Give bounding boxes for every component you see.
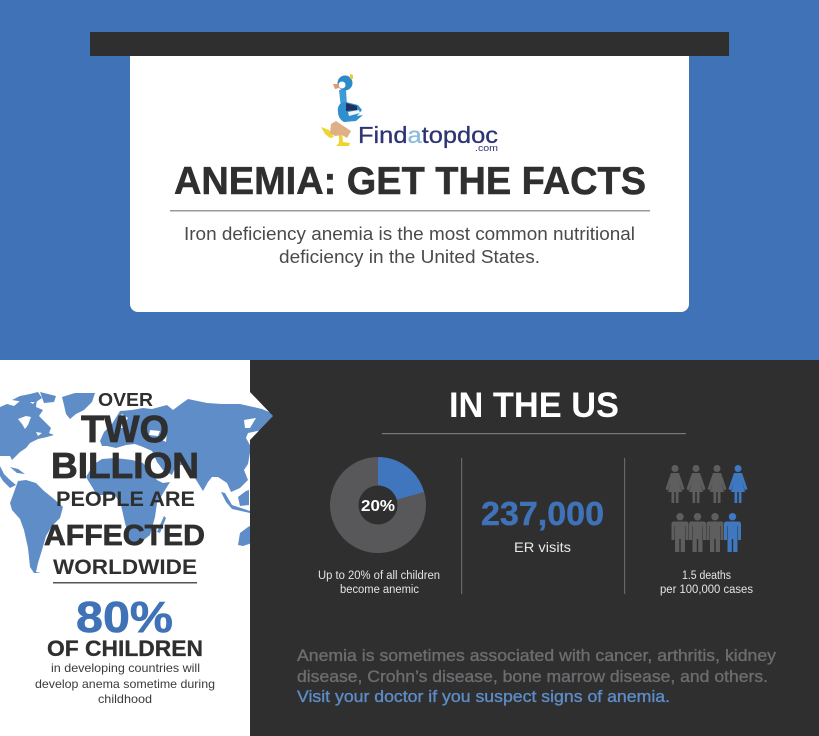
Greenland xyxy=(62,393,95,419)
PEOPLE ARE: PEOPLE ARE xyxy=(56,488,195,511)
logo: Findatopdoc xyxy=(321,74,498,153)
associated conditions text: disease, Crohn’s disease, bone marrow disease, and others. xyxy=(297,667,768,686)
heading rule xyxy=(382,433,686,434)
intro text: Iron deficiency anemia is the most common nutritional xyxy=(184,224,635,244)
header card xyxy=(90,32,729,312)
Madagascar xyxy=(157,516,166,533)
dark top bar xyxy=(90,32,729,56)
Great Lakes xyxy=(36,432,42,436)
panel: in the US xyxy=(250,360,819,736)
children description: in developing countries will xyxy=(51,661,200,675)
associated conditions text: Anemia is sometimes associated with cancer, arthritis, kidney xyxy=(297,646,777,665)
Baltic xyxy=(118,414,128,428)
title rule xyxy=(170,210,650,212)
call to action: Visit your doctor if you suspect signs of anemia. xyxy=(297,687,670,706)
donut chart: 20 percent: 20% xyxy=(361,498,395,515)
Philippines and Japan xyxy=(240,445,247,455)
Caribbean xyxy=(10,467,25,474)
80 percent statistic: 80% xyxy=(76,593,173,642)
donut caption xyxy=(318,570,440,596)
deaths caption: 1.5 deaths xyxy=(682,570,731,582)
donut caption: Up to 20% of all children xyxy=(318,570,440,582)
ER visits label: ER visits xyxy=(514,539,571,555)
children description xyxy=(35,661,215,706)
Central America xyxy=(0,466,16,488)
icon: men row xyxy=(672,513,741,552)
children description: develop anema sometime during xyxy=(35,677,215,691)
children description: childhood xyxy=(98,692,152,706)
Indochina islands xyxy=(238,490,249,506)
Eurasia xyxy=(100,399,274,492)
header band xyxy=(0,0,819,360)
heading: IN THE US xyxy=(449,386,619,425)
icon: duck mascot xyxy=(321,74,363,146)
Black Sea and Caspian xyxy=(149,430,167,442)
column divider xyxy=(624,458,625,594)
icon: women row xyxy=(666,465,748,503)
Hudson Bay xyxy=(18,416,31,429)
donut caption: become anemic xyxy=(340,584,419,596)
deaths caption xyxy=(660,570,753,596)
Sumatra and Java xyxy=(221,492,250,513)
North America xyxy=(0,399,54,460)
WORLDWIDE: WORLDWIDE xyxy=(53,556,197,579)
Kamchatka gap xyxy=(244,418,256,428)
column divider xyxy=(461,458,462,594)
OVER: OVER xyxy=(98,389,153,410)
Australia xyxy=(238,525,252,546)
Africa xyxy=(86,458,170,544)
donut chart: 20 percent xyxy=(330,457,426,553)
wordmark suffix: .com xyxy=(475,143,498,153)
of children heading: OF CHILDREN xyxy=(47,636,203,661)
intro text xyxy=(184,224,635,267)
associated conditions text xyxy=(297,646,777,706)
South America xyxy=(10,480,63,573)
intro text: deficiency in the United States. xyxy=(279,247,540,267)
Arctic islands xyxy=(12,392,56,403)
inland seas xyxy=(18,414,256,442)
wordmark: Findatopdoc xyxy=(358,122,498,148)
ER visits figure: 237,000 xyxy=(481,495,604,532)
title: ANEMIA: GET THE FACTS xyxy=(174,160,646,203)
deaths caption: per 100,000 cases xyxy=(660,584,753,596)
BILLION: BILLION xyxy=(51,445,199,486)
worldwide statistic text xyxy=(44,389,205,579)
AFFECTED: AFFECTED xyxy=(44,520,205,552)
left rule xyxy=(53,582,197,584)
world map xyxy=(0,392,274,573)
TWO: TWO xyxy=(81,409,169,451)
white body background xyxy=(0,360,300,736)
